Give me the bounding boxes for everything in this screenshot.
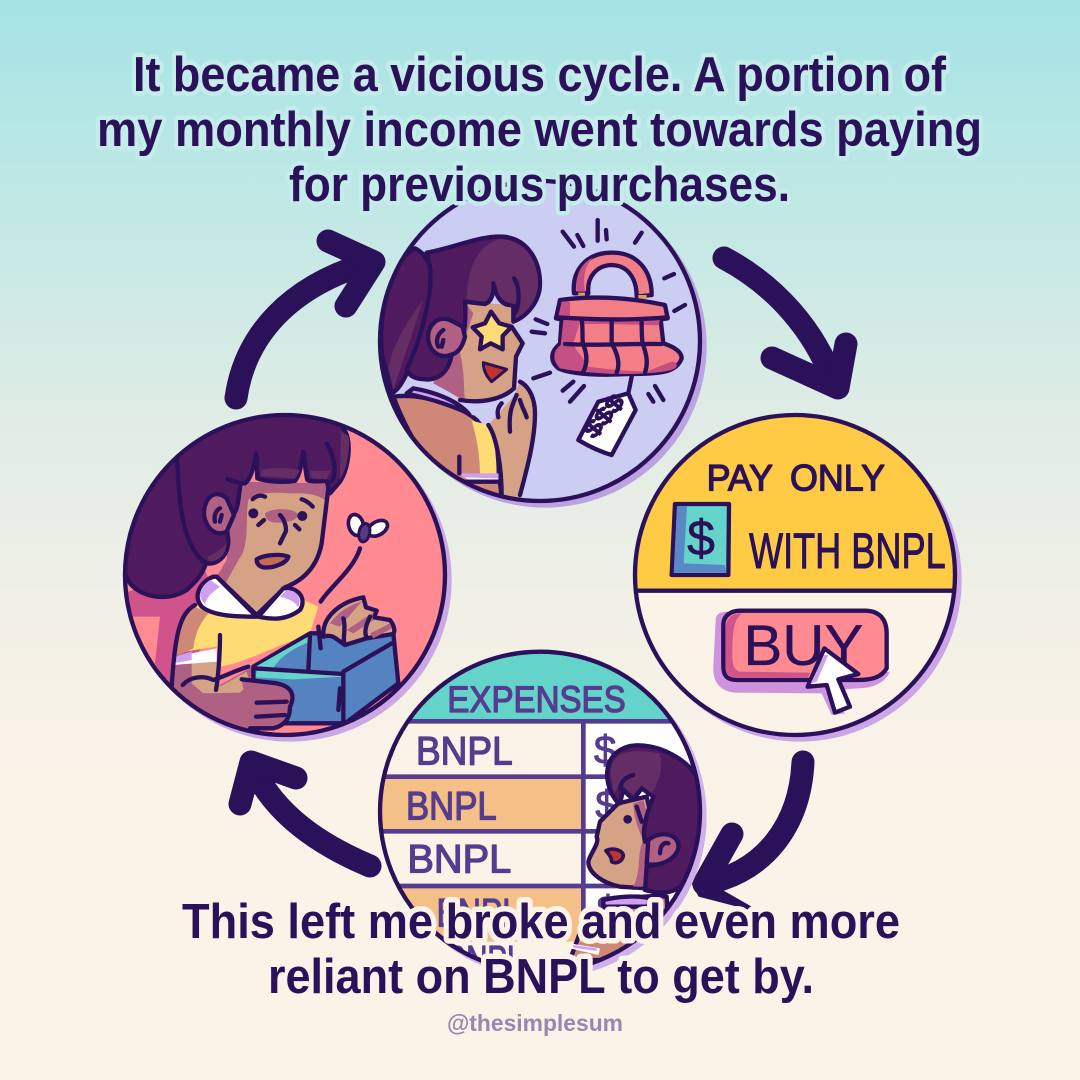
gift box [253, 633, 398, 723]
title: for previous purchases. [289, 158, 790, 212]
BNPL row 4: BNPL [437, 892, 520, 936]
ear [428, 319, 465, 356]
ear [204, 494, 234, 533]
hair [177, 410, 349, 564]
BNPL row 5: BNPL [447, 938, 523, 982]
face and neck [218, 492, 325, 612]
dollar column: $ [595, 784, 618, 828]
orange rows [382, 779, 581, 829]
ponytail [127, 462, 208, 600]
circle panel: disappointed person with box [122, 412, 452, 742]
conclusion text: This left me broke and even more [182, 895, 900, 949]
pay only label: PAY ONLY [707, 457, 885, 499]
dollar sign: $ [687, 510, 715, 566]
expenses label: EXPENSES [447, 678, 626, 720]
buy label: BUY [743, 614, 863, 678]
BNPL row 3: BNPL [407, 838, 511, 882]
dollar column: $ [597, 888, 619, 932]
face [588, 797, 660, 888]
ear [647, 834, 678, 865]
title: my monthly income went towards paying [97, 103, 982, 157]
circle panel: pay only with BNPL [632, 412, 962, 742]
circle panel: shopper admiring an expensive bag [370, 180, 720, 510]
sparkle marks around bag [532, 220, 685, 402]
hair [407, 237, 540, 379]
chair [128, 571, 208, 680]
mouth [483, 363, 507, 382]
title [97, 48, 982, 212]
conclusion text [182, 895, 900, 1004]
arrow: top circle to right circle [724, 258, 846, 388]
price tag text: $$$ [579, 389, 629, 443]
conclusion text: reliant on BNPL to get by. [268, 950, 814, 1004]
arrow: left circle to top circle [236, 241, 374, 398]
ponytail [381, 248, 432, 393]
circle panel: expenses table [378, 650, 707, 971]
body and shirt [393, 382, 535, 500]
table lines [383, 719, 672, 912]
credit handle: @thesimplesum [447, 1010, 623, 1036]
arrow: bottom circle to left circle [240, 762, 370, 866]
handbag [552, 253, 682, 375]
fly and wire [321, 513, 390, 602]
icon: mouse cursor [808, 648, 858, 713]
hair tie [432, 263, 438, 288]
price tag [578, 377, 636, 455]
BNPL row 1: BNPL [416, 730, 513, 774]
hands [242, 597, 394, 728]
BNPL row 2: BNPL [406, 784, 497, 828]
cycle arrows [236, 241, 846, 908]
person looking at table [570, 745, 700, 960]
with BNPL label: WITH BNPL [749, 523, 946, 579]
hair [607, 745, 700, 893]
face details [248, 496, 313, 567]
face [450, 303, 520, 400]
star eye [473, 312, 512, 349]
icon: dollar bill [672, 504, 729, 575]
dollar column: $ [594, 728, 616, 772]
dollar column [594, 734, 616, 908]
body and shirt [167, 600, 318, 732]
arrow: right circle to bottom circle [692, 762, 803, 908]
title: It became a vicious cycle. A portion of [133, 48, 947, 102]
collar [198, 577, 303, 619]
buy button [713, 611, 890, 715]
